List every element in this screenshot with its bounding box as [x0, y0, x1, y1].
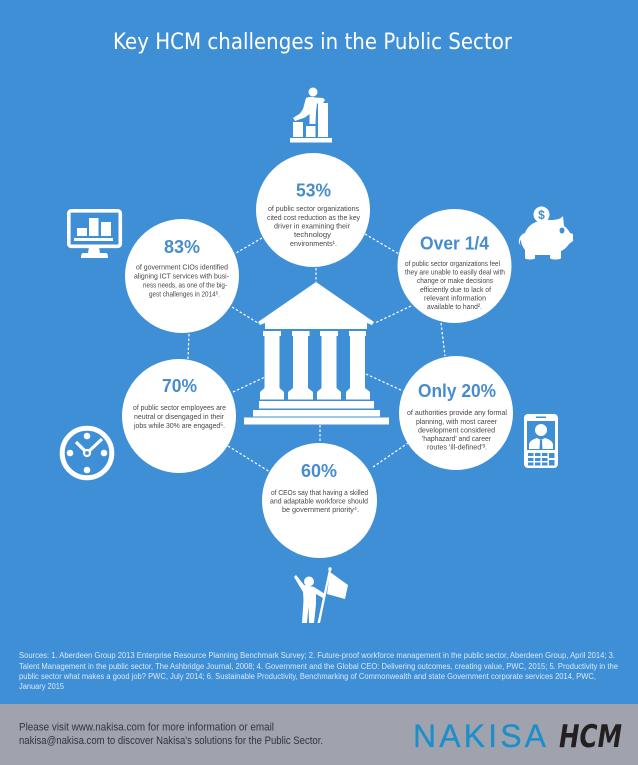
panel: 60%: and adaptable workforce should [270, 496, 368, 506]
panel: Over 1/4: they are unable to easily deal with [405, 268, 505, 277]
icon: clock [62, 428, 112, 478]
panel: Only 20%: routes 'ill-defined'³. [427, 442, 487, 452]
sources text: Sources: 1. Aberdeen Group 2013 Enterprise Resource Planning Benchmark Survey; 2. Future-proof workforce management in the public sector, Aberdeen Group, April 2014; 3. [19, 651, 615, 660]
panel: 70%: of public sector employees are [133, 403, 226, 412]
panel: Only 20%: Only 20% [418, 381, 496, 401]
footer band: nakisa@nakisa.com to discover Nakisa's solutions for the Public Sector. [19, 735, 323, 747]
logo: Nakisa: NAKISA [413, 718, 547, 754]
logo: HCM: HCM [559, 719, 622, 755]
panel: 53%: technology [294, 230, 331, 239]
panel: 83%: gest challenges in 2014⁶. [149, 290, 220, 298]
icon: government building [244, 282, 389, 424]
panel: 53%: driver in examining their [274, 222, 350, 230]
icon: person climbing steps [290, 88, 332, 142]
panel: 70%: neutral or disengaged in their [134, 412, 224, 421]
icon: piggy bank with coin: $ [538, 208, 545, 222]
panel: 60%: be government priority⁴. [282, 505, 359, 514]
panel: Only 20%: 'haphazard' and career [422, 434, 491, 443]
panel: Over 1/4: relevant information [424, 294, 486, 302]
panel: Over 1/4: Over 1/4 [420, 234, 489, 254]
panel: Only 20%: planning, with most career [416, 417, 497, 426]
panel: 70%: jobs while 30% are engaged⁵. [133, 421, 225, 430]
panel: 83%: aligning ICT services with busi- [134, 272, 229, 280]
panel: 53% [256, 153, 370, 267]
footer band: Please visit www.nakisa.com for more information or email [19, 722, 274, 734]
sources text: public sector what makes a good job? PWC, July 2014; 6. Sustainable Productivity, Benchmarking of Commonwealth and state Government corporate services 2014, PWC, [19, 672, 596, 681]
icon: phone with contact [524, 414, 558, 468]
panel: Over 1/4: change or make decisions [417, 276, 493, 285]
icon: piggy bank with coin [519, 206, 573, 260]
panel: 60%: 60% [301, 461, 337, 481]
footer band [0, 704, 638, 765]
panel: 60% [262, 443, 377, 558]
panel: 83%: 83% [164, 237, 200, 257]
panel: 83%: of government CIOs identified [136, 262, 228, 272]
sources text: Talent Management in the public sector, The Ashbridge Journal, 2008; 4. Government and the Global CEO: Delivering outcomes, creating value, PWC, 2015; 5. Productivity in the [19, 662, 618, 671]
panel: Only 20%: development considered [418, 426, 495, 434]
panel: 70% [122, 359, 236, 473]
panel: Over 1/4: available to hand². [427, 302, 482, 311]
sources text: January 2015 [19, 682, 65, 691]
panel: 53%: cited cost reduction as the key [267, 213, 360, 222]
panel: 53%: environments¹. [290, 239, 337, 248]
sources text [19, 651, 618, 691]
panel: 83% [125, 219, 239, 333]
panel: 70%: 70% [162, 376, 197, 396]
panel: Only 20% [399, 356, 513, 470]
panel: 83%: ness needs, as one of the big- [143, 280, 227, 290]
icon: monitor with bar chart [69, 211, 120, 258]
panel: Over 1/4 [398, 209, 512, 323]
panel: 53%: of public sector organizations [268, 204, 359, 213]
panel: 53%: 53% [296, 180, 331, 200]
panel: 60%: of CEOs say that having a skilled [271, 488, 368, 497]
panel: Only 20%: of authorities provide any formal [407, 408, 507, 417]
icon: person with flag [294, 567, 348, 623]
panel: Over 1/4: of public sector organizations feel [405, 259, 500, 268]
panel: Over 1/4: efficiently due to lack of [420, 285, 492, 294]
title: Key HCM challenges in the Public Sector [113, 30, 513, 55]
